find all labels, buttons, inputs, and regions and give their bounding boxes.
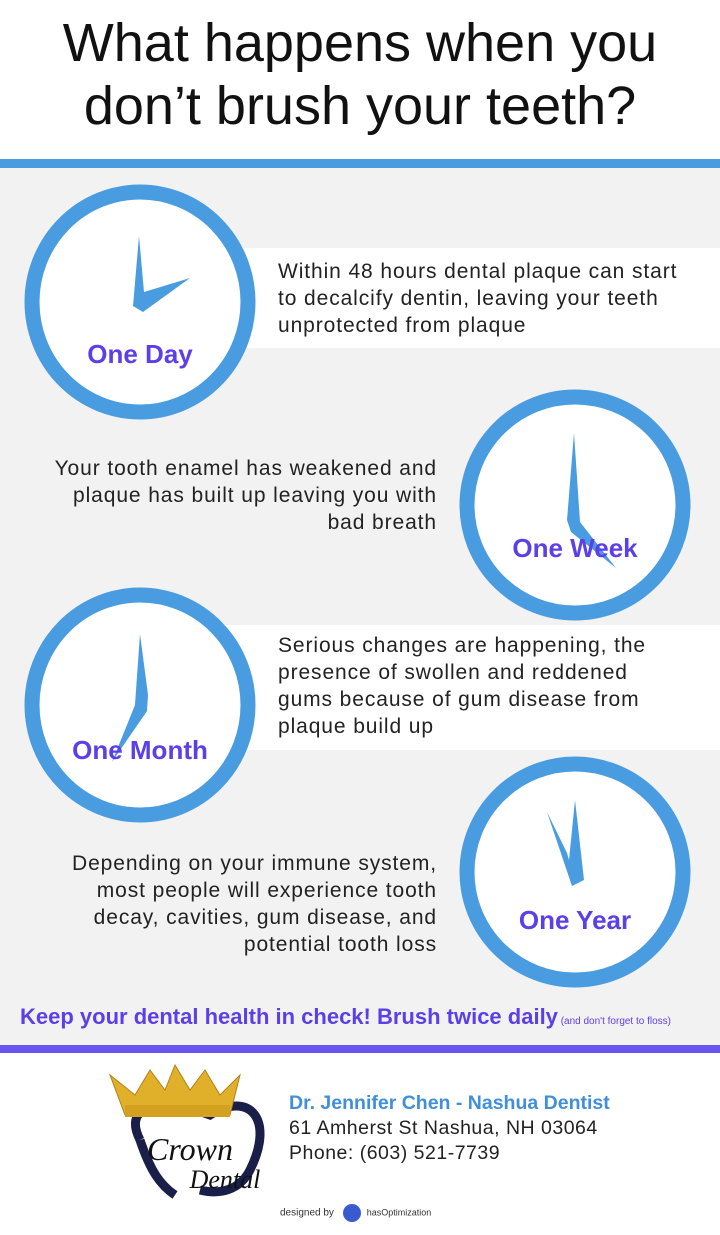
purple divider bar bbox=[0, 1045, 720, 1053]
text: one year bbox=[72, 852, 437, 956]
clock: one day: One Day bbox=[87, 339, 193, 369]
clock: one week: One Week bbox=[512, 533, 638, 563]
contact info: 61 Amherst St Nashua, NH 03064 bbox=[289, 1117, 598, 1139]
clock: one week bbox=[467, 397, 683, 613]
text: one month: presence of swollen and reddened bbox=[278, 661, 628, 684]
clock: one month: One Month bbox=[72, 735, 208, 765]
text: one year: Depending on your immune system, bbox=[72, 852, 437, 875]
white band 1 bbox=[200, 248, 720, 348]
text: one day: to decalcify dentin, leaving your teeth bbox=[278, 287, 659, 310]
title: don’t brush your teeth? bbox=[84, 76, 636, 136]
text: one month: gums because of gum disease from bbox=[278, 688, 639, 711]
gray content panel bbox=[0, 168, 720, 1045]
contact info: Dr. Jennifer Chen - Nashua Dentist bbox=[289, 1092, 610, 1114]
logo: crown dental: Dental bbox=[189, 1165, 260, 1194]
text: one day bbox=[278, 260, 677, 337]
title bbox=[63, 13, 657, 136]
text: one year: potential tooth loss bbox=[244, 933, 437, 956]
logo: crown dental bbox=[109, 1064, 264, 1199]
text: one year: decay, cavities, gum disease, and bbox=[94, 906, 437, 929]
clock: one month bbox=[32, 595, 248, 815]
tagline: Keep your dental health in check! Brush twice daily (and don't forget to floss) bbox=[20, 1004, 671, 1029]
text: one month bbox=[278, 634, 646, 738]
text: one day: Within 48 hours dental plaque can start bbox=[278, 260, 677, 283]
text: one week: Your tooth enamel has weakened and bbox=[55, 457, 437, 480]
text: one day: unprotected from plaque bbox=[278, 314, 526, 337]
clock: one year bbox=[467, 764, 683, 980]
designed by credit: designed by hasOptimization bbox=[280, 1208, 431, 1219]
white band 3 bbox=[200, 625, 720, 750]
blue divider bar bbox=[0, 159, 720, 168]
title: What happens when you bbox=[63, 13, 657, 73]
text: one week: bad breath bbox=[328, 511, 437, 534]
clock: one day bbox=[32, 192, 248, 412]
clock: one year: One Year bbox=[519, 905, 631, 935]
logo: crown dental: Crown bbox=[147, 1131, 233, 1167]
contact info bbox=[289, 1092, 610, 1164]
text: one month: Serious changes are happening, the bbox=[278, 634, 646, 657]
text: one week bbox=[55, 457, 437, 534]
text: one week: plaque has built up leaving you with bbox=[73, 484, 437, 507]
text: one month: plaque build up bbox=[278, 715, 434, 738]
designed by credit bbox=[280, 1204, 431, 1222]
text: one year: most people will experience tooth bbox=[97, 879, 437, 902]
contact info: Phone: (603) 521-7739 bbox=[289, 1142, 500, 1164]
